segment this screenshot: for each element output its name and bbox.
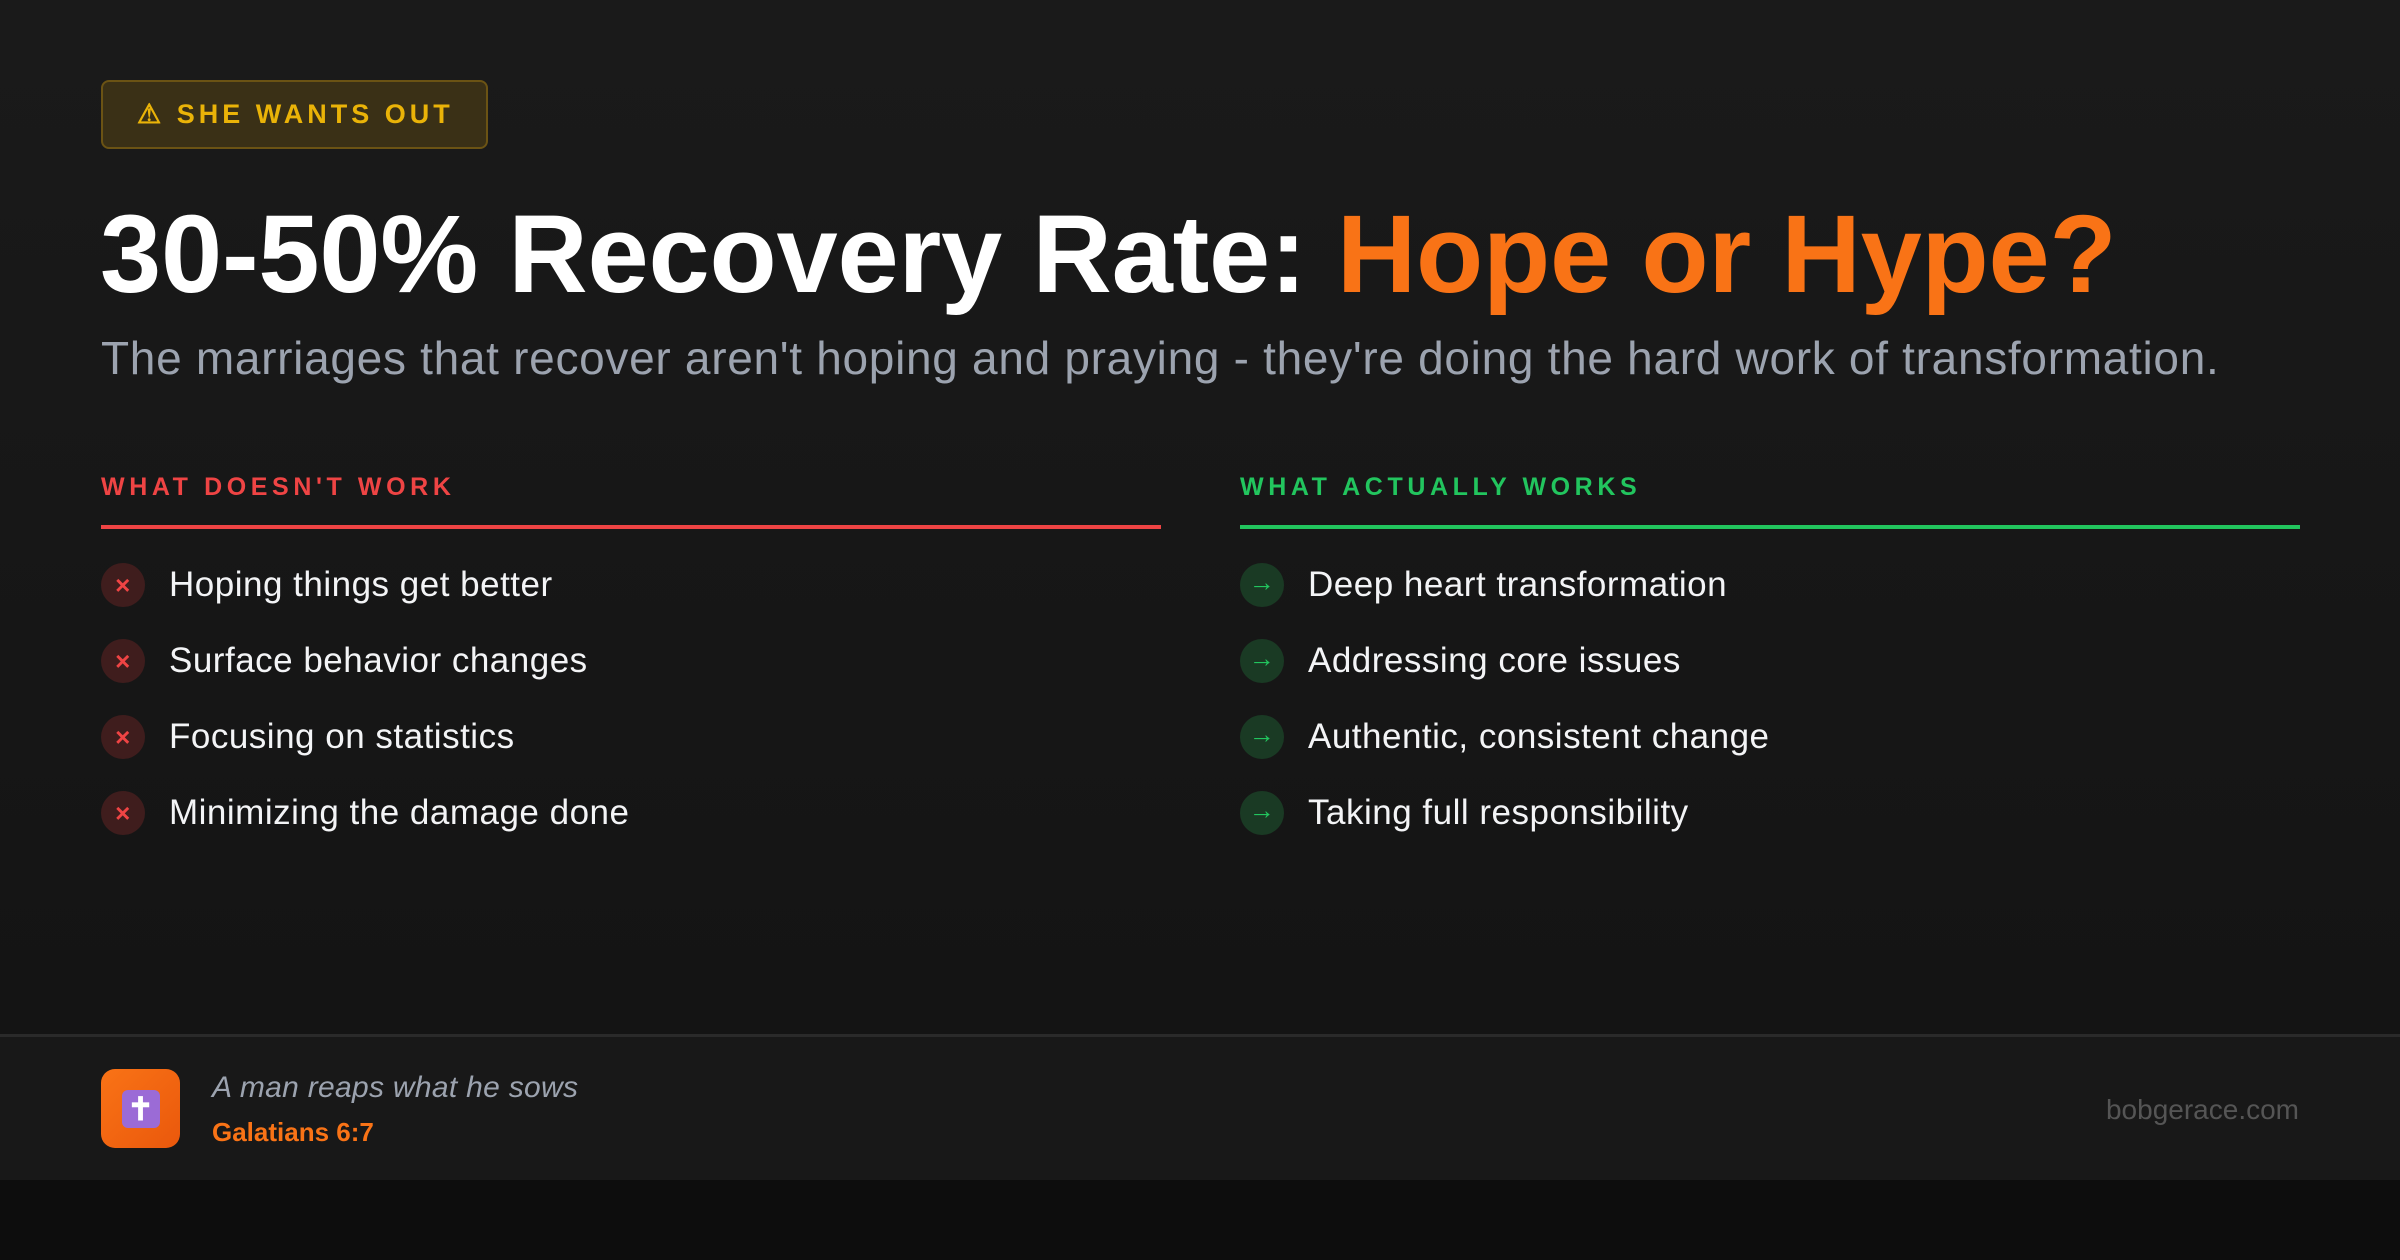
heading: what doesn't work: WHAT DOESN'T WORK	[101, 473, 455, 501]
item: →	[1249, 719, 1275, 749]
item: →	[1249, 643, 1275, 673]
item: Addressing core issues	[1308, 641, 1681, 680]
item: Taking full responsibility	[1308, 793, 1689, 832]
item: ×	[115, 646, 131, 676]
website: bobgerace.com	[2106, 1094, 2299, 1125]
item: ×	[115, 798, 131, 828]
heading: what doesn't work	[101, 470, 1161, 529]
item: ×	[115, 570, 131, 600]
panel: what doesn't work	[101, 473, 1161, 835]
badge: she wants out: ⚠ SHE WANTS OUT	[137, 99, 454, 129]
heading: what actually works	[1240, 470, 2300, 529]
badge: she wants out	[101, 80, 488, 149]
heading: what actually works: WHAT ACTUALLY WORKS	[1240, 473, 1641, 501]
title: 30-50% Recovery Rate: Hope or Hype?	[100, 193, 2117, 316]
item: →	[1249, 567, 1275, 597]
item: Hoping things get better	[169, 565, 553, 604]
footer	[0, 1034, 2400, 1180]
item: Deep heart transformation	[1308, 565, 1727, 604]
item: ×	[115, 722, 131, 752]
icon: cross	[101, 1069, 180, 1148]
item: Authentic, consistent change	[1308, 717, 1770, 756]
icon: cross: ✝	[127, 1090, 154, 1126]
quote: A man reaps what he sows	[212, 1071, 578, 1104]
item: Surface behavior changes	[169, 641, 588, 680]
reference: Galatians 6:7	[212, 1117, 374, 1147]
item: →	[1249, 795, 1275, 825]
item: Focusing on statistics	[169, 717, 515, 756]
item: Minimizing the damage done	[169, 793, 629, 832]
subtitle: The marriages that recover aren't hoping and praying - they're doing the hard work of transformation.	[101, 332, 2219, 384]
panel: what actually works	[1240, 473, 2300, 835]
